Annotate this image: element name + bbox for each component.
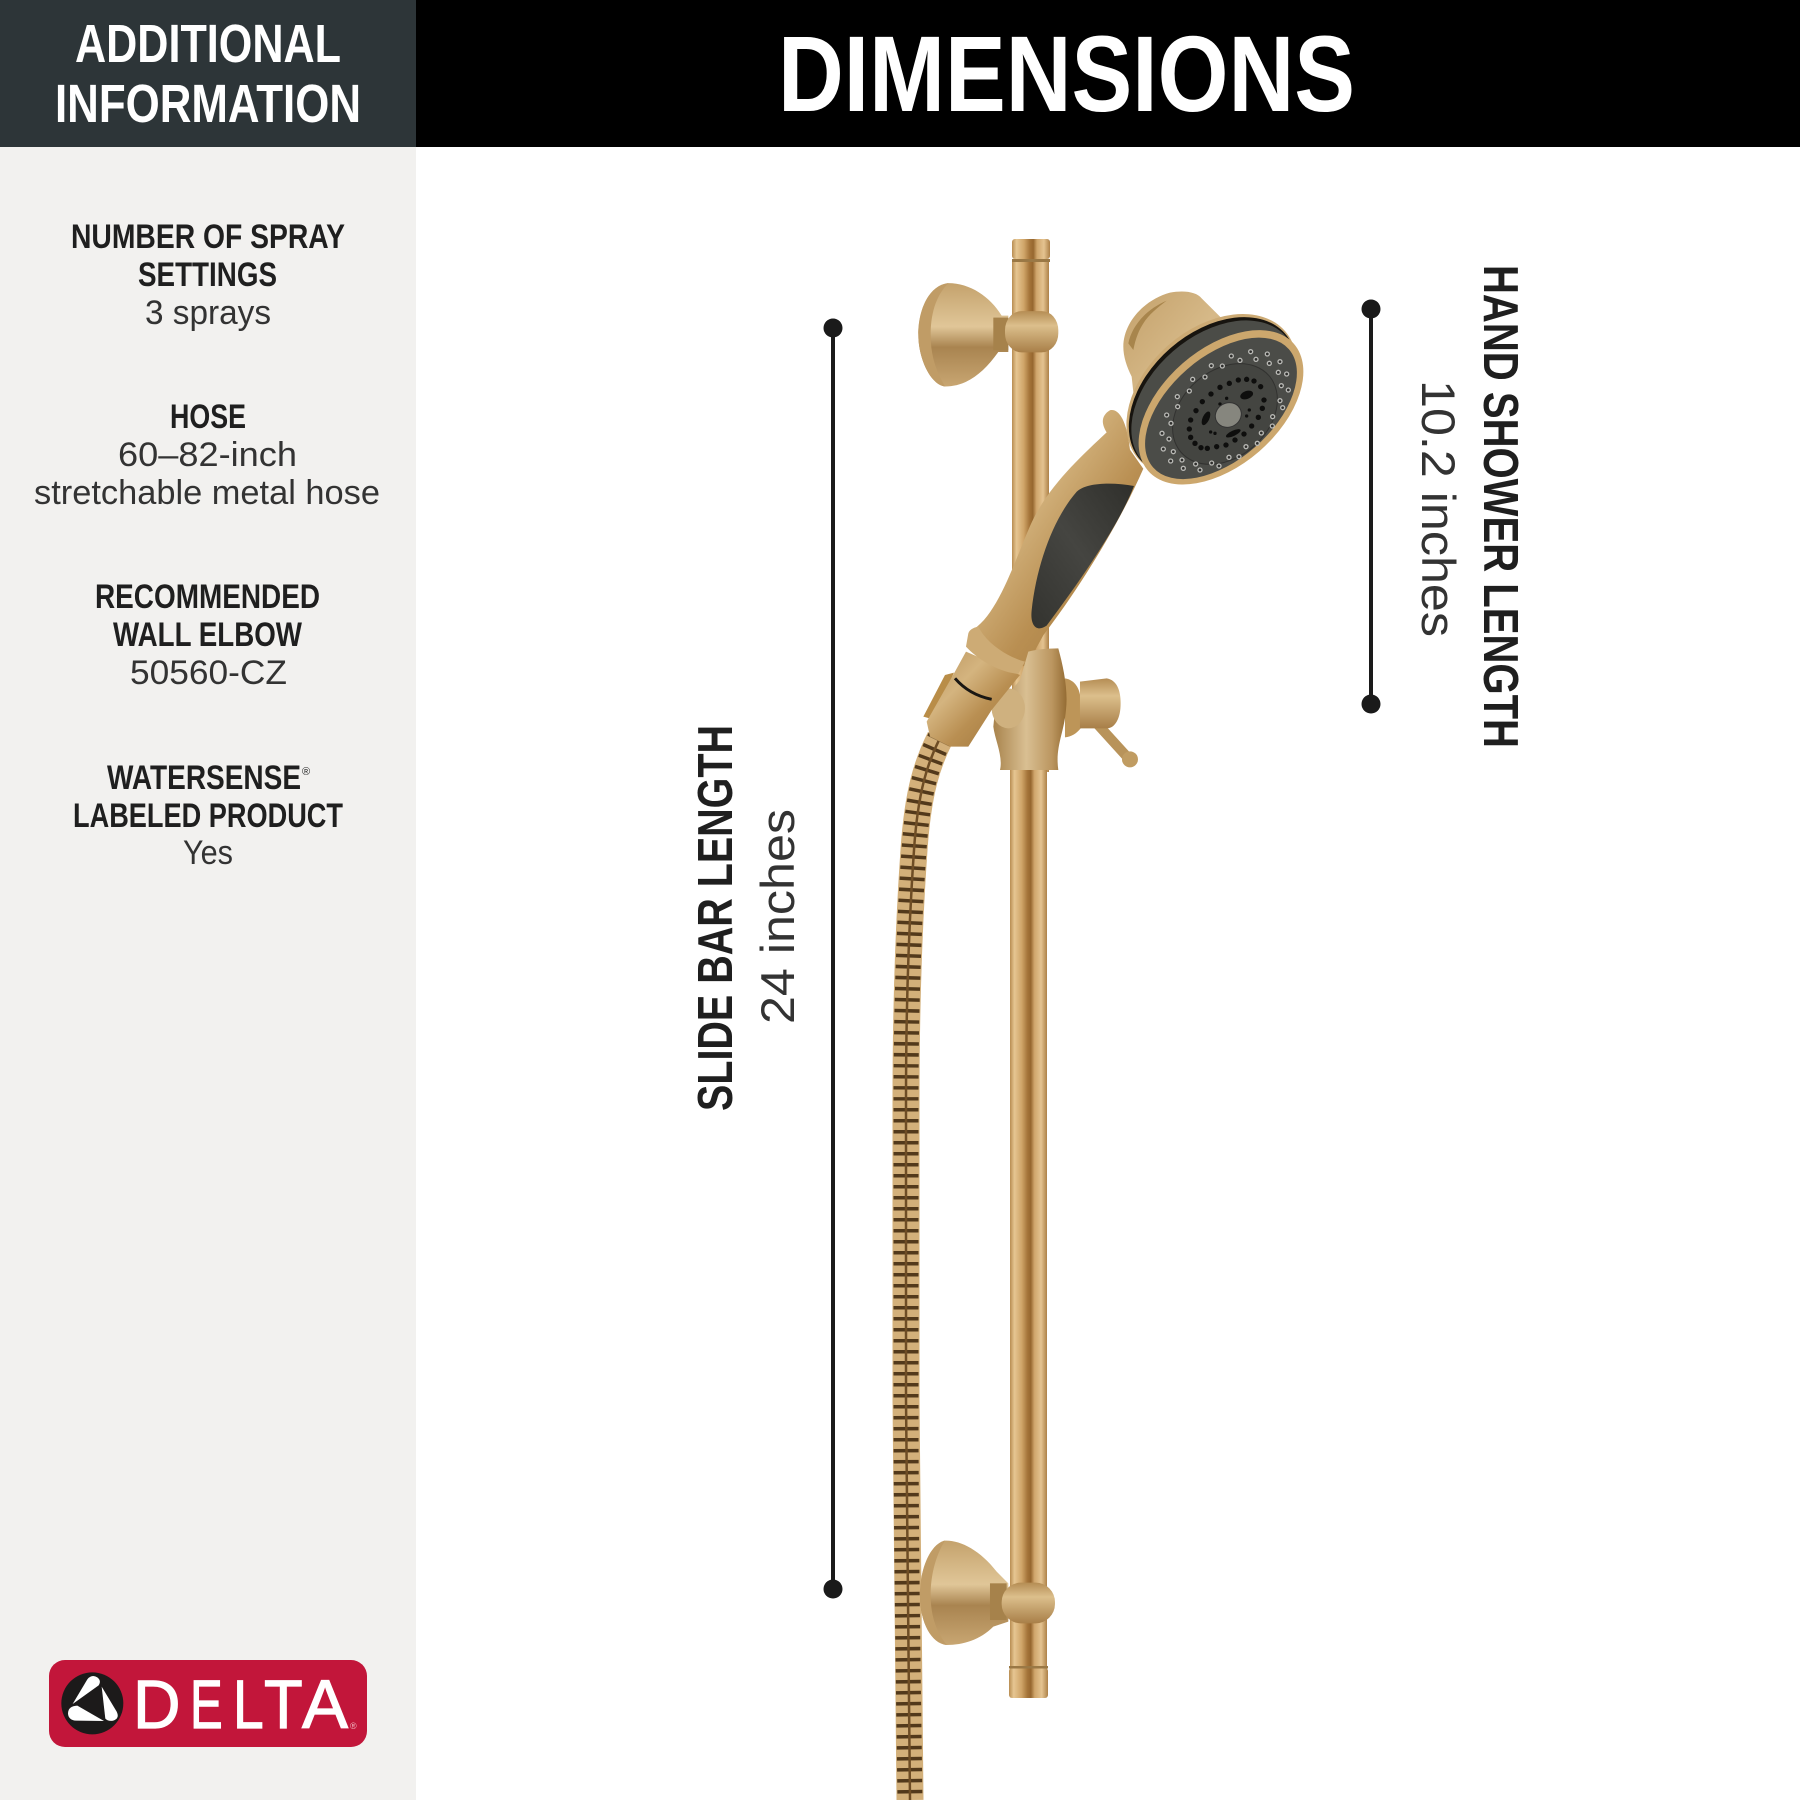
wordmark: T <box>264 1666 303 1743</box>
spec: hose: 60–82-inch <box>118 436 297 474</box>
spec: number of spray settings: 3 sprays <box>145 294 271 332</box>
label: hand shower length: HAND SHOWER LENGTH <box>1473 265 1527 748</box>
spec: number of spray settings <box>71 218 345 332</box>
handle with dark grip <box>967 410 1143 666</box>
collar <box>966 627 1025 674</box>
spec: number of spray settings: SETTINGS <box>138 256 277 294</box>
wordmark: L <box>233 1666 264 1743</box>
spec: recommended wall elbow: WALL ELBOW <box>113 616 303 654</box>
slider bracket and connector <box>923 627 1138 770</box>
spec: hose <box>34 398 380 512</box>
outer nozzles <box>1160 350 1290 472</box>
heading: additional information: INFORMATION <box>55 74 361 134</box>
wordmark: A <box>302 1666 348 1743</box>
label: slide bar length <box>689 725 804 1111</box>
center plate <box>1211 398 1246 432</box>
heading: dimensions <box>416 0 1800 147</box>
product: hand shower and slide bar <box>906 239 1332 1800</box>
outer rim <box>1095 281 1328 509</box>
upper wall mount <box>918 283 1058 386</box>
spec: watersense labeled product: WATERSENSE <box>107 759 301 797</box>
wordmark: E <box>190 1666 223 1743</box>
spec: hose: HOSE <box>170 398 246 436</box>
heading: additional information <box>0 0 416 147</box>
spec: hose: stretchable metal hose <box>34 474 380 512</box>
spec: watersense labeled product <box>73 759 343 872</box>
dimension line: hand shower length <box>1362 300 1380 714</box>
gold face ring <box>1110 300 1332 515</box>
wordmark: D <box>133 1666 180 1743</box>
spec: number of spray settings: NUMBER OF SPRAY <box>71 218 345 256</box>
logo: Delta: ® <box>350 1721 357 1731</box>
inner spray holes <box>1187 377 1267 451</box>
label: slide bar length: SLIDE BAR LENGTH <box>689 725 743 1111</box>
panel: additional information sidebar <box>0 0 416 1800</box>
icon: Delta emblem <box>61 1672 123 1734</box>
label: hand shower length: 10.2 inches <box>1412 380 1465 637</box>
lower wall mount <box>920 1541 1055 1645</box>
spec: recommended wall elbow: 50560-CZ <box>130 654 287 692</box>
spec: watersense labeled product: Yes <box>183 834 233 872</box>
shower head <box>1095 281 1332 515</box>
right knob and lever <box>1065 678 1138 767</box>
spec: watersense labeled product: LABELED PRODUCT <box>73 797 343 835</box>
label: slide bar length: 24 inches <box>751 809 804 1024</box>
bracket body <box>993 648 1067 770</box>
heading: dimensions: DIMENSIONS <box>778 13 1355 134</box>
label: hand shower length <box>1412 265 1527 748</box>
head cup <box>1123 291 1233 423</box>
spec: watersense labeled product: ® <box>302 766 310 778</box>
logo: Delta <box>49 1660 367 1747</box>
spec: recommended wall elbow: RECOMMENDED <box>95 578 320 616</box>
spec: recommended wall elbow <box>95 578 320 692</box>
heading: additional information: ADDITIONAL <box>75 14 341 74</box>
connector <box>923 673 954 719</box>
hose <box>906 738 940 1800</box>
slide bar <box>1009 239 1050 1698</box>
dimension line: slide bar length <box>824 318 842 1598</box>
wordmark <box>133 1666 348 1743</box>
